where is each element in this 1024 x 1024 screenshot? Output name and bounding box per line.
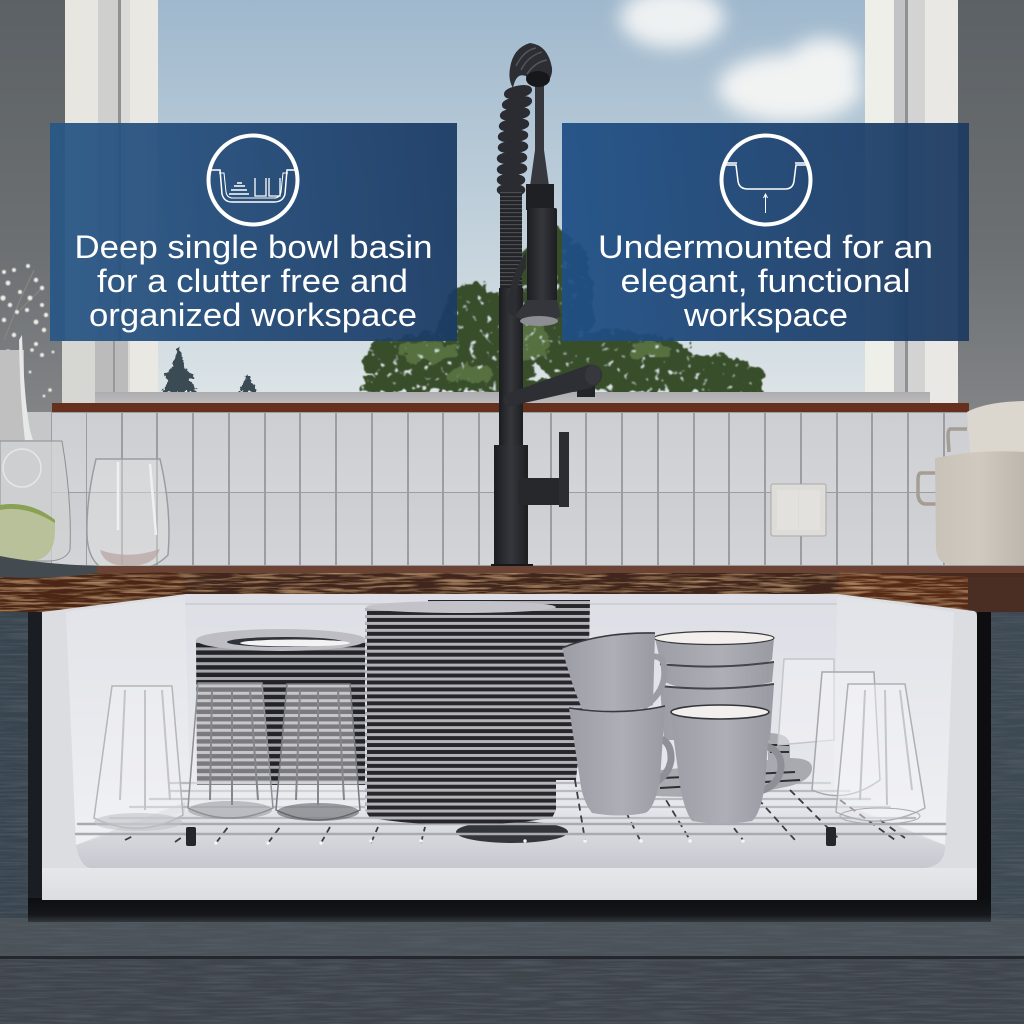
upper pot — [948, 401, 1024, 452]
glasses left — [94, 683, 360, 831]
glass 3 — [276, 684, 360, 821]
sink outer rim — [42, 594, 977, 900]
glass vase — [0, 335, 33, 442]
heading lines — [598, 229, 933, 333]
heading lines — [74, 229, 432, 333]
back wall — [185, 595, 837, 835]
window sill — [95, 392, 930, 404]
left inner wall — [66, 596, 190, 845]
clouds — [620, 0, 862, 122]
mug right — [670, 705, 781, 824]
bowls — [654, 632, 774, 740]
pull-down spring coil — [500, 87, 529, 193]
stacked pots — [918, 401, 1024, 565]
sink — [42, 594, 977, 900]
icon: sink with dishes — [208, 136, 298, 224]
flowering branch — [0, 264, 54, 397]
middle glass — [812, 672, 880, 796]
lower pot — [918, 451, 1024, 565]
wooden shelf — [52, 403, 969, 412]
left plate stack — [196, 629, 367, 785]
faucet base — [491, 564, 533, 571]
main plate stack — [365, 601, 556, 825]
mug top left — [562, 633, 664, 711]
exterior wall — [0, 0, 1024, 415]
heading lines: elegant, functional — [620, 263, 910, 299]
front glass — [836, 684, 925, 824]
spring sheath — [500, 192, 522, 292]
heading lines: Undermounted for an — [598, 229, 933, 265]
heading lines: for a clutter free and — [97, 263, 408, 299]
back right plate stack — [428, 600, 590, 780]
glass 1 — [94, 686, 183, 831]
coil top cap — [509, 43, 552, 88]
hose — [530, 84, 549, 186]
right inner wall — [834, 596, 954, 845]
heading lines: organized workspace — [89, 297, 417, 333]
faucet — [491, 43, 602, 571]
mug bottom left — [569, 706, 671, 816]
panel: undermounted — [562, 123, 969, 341]
back glass — [778, 659, 834, 745]
trees outside — [162, 225, 766, 395]
sink floor — [76, 810, 945, 868]
folded towel — [0, 556, 97, 578]
heading lines: workspace — [683, 297, 848, 333]
spout — [503, 365, 602, 407]
countertop — [0, 566, 1024, 612]
faucet body — [494, 445, 528, 565]
front lip — [42, 868, 977, 900]
wall outlet — [771, 484, 826, 536]
drain — [456, 821, 568, 843]
window — [62, 0, 958, 405]
wine glass — [87, 459, 169, 572]
heading lines: Deep single bowl basin — [74, 229, 432, 265]
cabinet — [0, 612, 1024, 1024]
glasses right — [778, 659, 925, 824]
spray head — [515, 184, 561, 326]
panel: deep single bowl basin — [50, 123, 457, 341]
tile backsplash — [0, 412, 1024, 568]
icon: undermount sink with arrow — [722, 136, 810, 224]
glass 2 — [188, 683, 273, 819]
window sky — [158, 0, 865, 392]
small plate stack — [655, 733, 812, 797]
lever — [518, 432, 569, 507]
spray arm — [506, 252, 526, 316]
faucet stem — [499, 288, 523, 448]
rack wires — [76, 780, 946, 846]
glass jar with lime — [0, 441, 70, 561]
